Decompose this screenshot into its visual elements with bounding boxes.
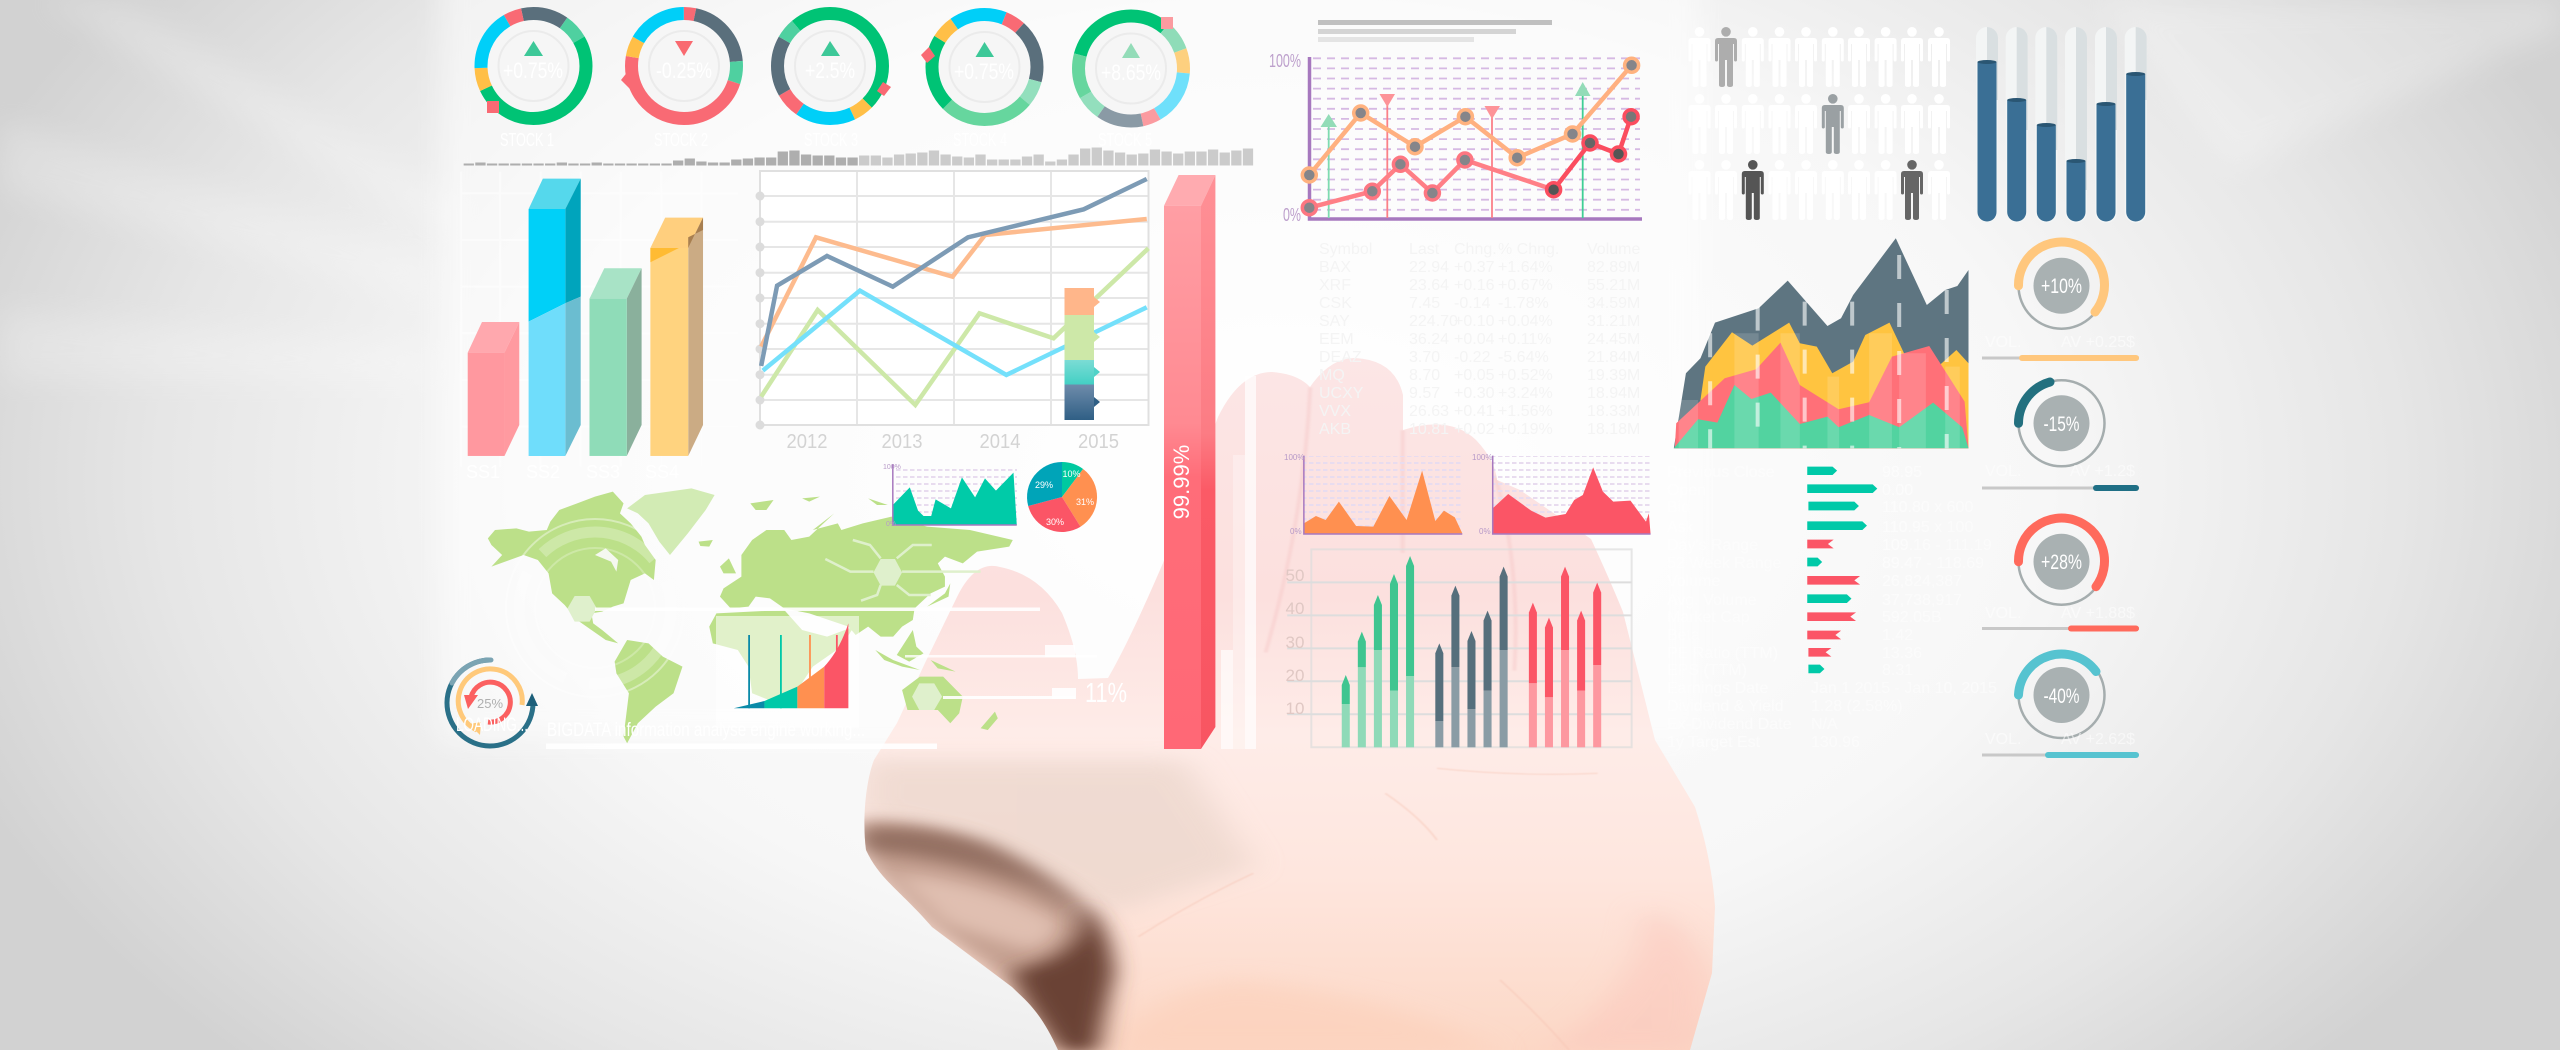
stock table: +0.02: [1454, 421, 1495, 438]
bar labels: SS2: [526, 462, 560, 482]
axis numbers: 50: [1286, 566, 1304, 585]
key statistics labels: Ex-Dividend Date: [1667, 716, 1792, 733]
key statistics labels: Open: [1667, 482, 1706, 499]
stock table: Chng.: [1454, 241, 1497, 258]
stock table: % Chng.: [1498, 241, 1559, 258]
map white rings: [506, 519, 684, 697]
stock table: 18.33M: [1587, 403, 1640, 420]
stock table: VVX: [1319, 403, 1351, 420]
axis numbers: 30: [1286, 633, 1304, 652]
bar labels: SS1: [466, 462, 500, 482]
stock table: XRF: [1319, 277, 1351, 294]
wrist warm shading: [1142, 985, 1427, 1041]
textured light area: [892, 873, 1059, 950]
stock table: +0.16: [1454, 277, 1495, 294]
year labels: 2012: [786, 431, 828, 453]
stock table: -1.78%: [1498, 295, 1549, 312]
Eurasia: [720, 513, 1013, 637]
stock table: +0.37: [1454, 259, 1495, 276]
donut: stock 5: [1078, 16, 1184, 150]
gauge: +28%: [1982, 518, 2139, 632]
gauge: +10%: VOL.: [1985, 334, 2021, 351]
stock table: 31.21M: [1587, 313, 1640, 330]
Africa: [709, 610, 854, 703]
tall red 3D bar: [1164, 175, 1215, 749]
donut: stock 5: STOCK 5: [1098, 130, 1152, 150]
key statistics labels: 1.42: [1882, 627, 1913, 644]
key statistics labels: 52 Week Range: [1667, 555, 1782, 572]
green series: [1342, 650, 1414, 747]
South America: [615, 640, 682, 743]
gauge: -40%: -40%: [2044, 685, 2080, 708]
key statistics labels: 110.80 x 600: [1882, 499, 1973, 516]
donut: stock 2: [621, 14, 736, 150]
stock table: +1.56%: [1498, 403, 1553, 420]
stock table: UCXY: [1319, 385, 1364, 402]
brown crease band: [857, 827, 1101, 927]
stock table: Symbol: [1319, 241, 1372, 258]
axis numbers: 40: [1286, 599, 1304, 618]
stock table: -5.64%: [1498, 349, 1549, 366]
title placeholder bars: [1318, 20, 1552, 42]
stock table: +0.05: [1454, 367, 1495, 384]
donut: stock 2: STOCK 2: [654, 130, 708, 150]
key statistics labels: 37,738,917: [1882, 592, 1962, 609]
people pictogram grid: [1688, 27, 1950, 220]
stock table: +0.67%: [1498, 277, 1553, 294]
Hudson Bay: [595, 548, 618, 572]
teal area mini chart: 100%: [883, 464, 901, 471]
red mini area chart: [1472, 453, 1651, 536]
3D bar chart: [461, 172, 738, 467]
stock table: 18.94M: [1587, 385, 1640, 402]
stock table: [1319, 241, 1640, 438]
key statistics labels: 98.95: [1882, 464, 1922, 481]
gauge: -40%: AV +2.62$: [2061, 731, 2135, 748]
stock table: 22.94: [1409, 259, 1449, 276]
white connector lines and percent labels over thumb: [595, 608, 1127, 708]
key statistics labels: Jan 1 2015 - Jan 10, 2015: [1811, 680, 1997, 697]
stock table: Last: [1409, 241, 1440, 258]
pie chart: 29%: [1035, 480, 1053, 490]
gauge: -15%: VOL.: [1985, 463, 2021, 480]
stock table: 26.63: [1409, 403, 1449, 420]
donut: stock 4: [921, 14, 1037, 150]
stock table: +0.04: [1454, 331, 1495, 348]
key statistics labels: 89.47 - 118.69: [1882, 555, 1984, 572]
stock table: 7.45: [1409, 295, 1440, 312]
gauge: +28%: VOL.: [1985, 605, 2021, 622]
donut: stock 5: +8.65%: [1101, 60, 1161, 85]
orange series: [1302, 58, 1639, 182]
bar SS3: [589, 268, 642, 456]
gauge: -15%: AV +1.2$: [2070, 463, 2135, 480]
gauge: -15%: -15%: [2044, 413, 2080, 436]
stock table: 23.64: [1409, 277, 1449, 294]
white finger columns: [1221, 376, 1256, 749]
bar labels: [466, 462, 679, 482]
dark crease: [1012, 907, 1113, 1050]
stock table: MQ: [1319, 367, 1345, 384]
gauge: +10%: AV +0.25$: [2061, 334, 2135, 351]
donut: stock 3: [778, 14, 891, 150]
year labels: [786, 431, 1119, 453]
stock table: +0.41: [1454, 403, 1495, 420]
key statistics labels: 109.16 - 111.19: [1882, 537, 1992, 554]
stock table: +3.24%: [1498, 385, 1553, 402]
stock table: +0.11%: [1498, 331, 1552, 348]
circuit lines and hexagons: [567, 540, 981, 710]
pie chart: 31%: [1076, 497, 1094, 507]
gauge: +28%: +28%: [2041, 551, 2082, 574]
stock table: 19.39M: [1587, 367, 1640, 384]
donut gauges row: [481, 14, 1184, 150]
year labels: 2014: [980, 431, 1020, 453]
overlay rectangle on Africa: [716, 616, 859, 728]
key statistics labels: 1y Target Est: [1667, 734, 1761, 751]
gauge: -40%: VOL.: [1985, 731, 2021, 748]
stock table: DEAZ: [1319, 349, 1362, 366]
key statistics labels: 8.31: [1882, 662, 1913, 679]
stock table: Volume: [1587, 241, 1640, 258]
upper palm grey-tan wash: [863, 760, 1253, 913]
gauge: +28%: AV +1.88$: [2061, 605, 2135, 622]
teal area mini chart: 0%: [886, 521, 896, 528]
white connector lines and percent labels over thumb: 11%: [1085, 677, 1127, 708]
stock table: 18.18M: [1587, 421, 1640, 438]
growth curve mini chart: [734, 623, 848, 708]
stock table: 10.81: [1409, 421, 1449, 438]
gauge: +10%: +10%: [2041, 275, 2082, 298]
test tube bar chart: [1976, 27, 2147, 223]
donut: stock 3: STOCK 3: [804, 130, 858, 150]
stock table: AKB: [1319, 421, 1351, 438]
axes: [1310, 57, 1642, 219]
key statistics labels: PE Ratio (TTM): [1667, 645, 1778, 662]
axis labels: 100%: [1269, 51, 1301, 71]
donut: stock 4: +0.75%: [954, 59, 1014, 84]
key statistics labels: 110.95 x 100: [1882, 519, 1973, 536]
thumb base tan: [857, 820, 1110, 1050]
donut: stock 1: +0.75%: [503, 58, 563, 83]
key statistics labels: 130.96: [1811, 734, 1860, 751]
gauge: -40%: [1982, 652, 2139, 758]
year labels: 2013: [882, 431, 922, 453]
line chart: [756, 171, 1148, 453]
key statistics labels: 592.05B: [1882, 609, 1942, 626]
signal arrows: [1320, 82, 1590, 218]
bar SS2: [529, 179, 581, 456]
red series: [1529, 650, 1601, 747]
stock table: +0.19%: [1498, 421, 1553, 438]
bar labels: SS4: [645, 462, 679, 482]
bar SS1: [468, 322, 519, 456]
key statistics labels: 0.00: [1882, 482, 1913, 499]
orange mini area chart: 100%: [1284, 453, 1304, 462]
pie chart: 30%: [1046, 517, 1064, 527]
stock table: 3.70: [1409, 349, 1440, 366]
tall red 3D bar: 99.99%: [1169, 445, 1194, 519]
stock table: 24.45M: [1587, 331, 1640, 348]
key statistics labels: Earnings Date: [1667, 680, 1768, 697]
teal area mini chart: [883, 464, 1017, 528]
stock table: 36.24: [1409, 331, 1449, 348]
stock table: 55.21M: [1587, 277, 1640, 294]
gauge: -15%: [1982, 380, 2139, 491]
stock table: -0.22: [1454, 349, 1491, 366]
key statistics labels: Avg. Volume: [1667, 592, 1757, 609]
year labels: 2015: [1078, 431, 1119, 453]
loading spinner: [447, 660, 538, 746]
stock table: -0.14: [1454, 295, 1491, 312]
red mini area chart: 100%: [1472, 453, 1492, 462]
horizontal tag bars: [1807, 467, 1877, 673]
key statistics labels: Volume: [1667, 573, 1720, 590]
palm pink shading: [1582, 921, 1706, 1046]
loading spinner: LOADING...: [456, 715, 528, 736]
stock table: 21.84M: [1587, 349, 1640, 366]
key statistics labels: 13.36: [1882, 645, 1922, 662]
stock table: SAY: [1319, 313, 1350, 330]
stock table: 9.57: [1409, 385, 1440, 402]
orange mini area chart: 0%: [1290, 527, 1302, 536]
legend stack: [1064, 288, 1100, 420]
key statistics labels: Dividend & Yield: [1667, 698, 1784, 715]
donut: stock 1: [481, 14, 586, 150]
donut: stock 2: -0.25%: [656, 58, 712, 83]
key statistics labels: 1.28 (2.58%): [1811, 698, 1903, 715]
bar labels: SS3: [586, 462, 620, 482]
key statistics labels: N/A: [1811, 716, 1838, 733]
stock table: +0.52%: [1498, 367, 1553, 384]
axis numbers: 20: [1286, 666, 1304, 685]
stock table: 34.59M: [1587, 295, 1640, 312]
red series: [1302, 110, 1638, 215]
dashed grid: [1313, 58, 1640, 210]
key statistics labels: Beta: [1667, 627, 1700, 644]
orange mini area chart: [1284, 453, 1462, 536]
stock table: 8.70: [1409, 367, 1440, 384]
key statistics labels: Ask: [1667, 519, 1695, 536]
stock table: CSK: [1319, 295, 1352, 312]
key statistics labels: 26,824,387: [1882, 573, 1962, 590]
gauge: +10%: [1982, 242, 2139, 361]
finger separations: [1266, 388, 1516, 671]
donut: stock 1: STOCK 1: [500, 130, 554, 150]
axis labels: [1269, 51, 1301, 225]
world map: [488, 488, 1013, 743]
highlighted people: [1715, 27, 1923, 220]
volume strip bars: [469, 148, 1248, 166]
pie chart: [1027, 462, 1097, 532]
Greenland: [627, 488, 715, 555]
donut: stock 4: STOCK 4: [953, 130, 1007, 150]
key statistics labels: Market Cap: [1667, 609, 1750, 626]
Islands and Australia: [902, 677, 963, 723]
key statistics labels: Previous Close: [1667, 464, 1775, 481]
layered mountain area chart: [1674, 238, 1969, 448]
stock table: +0.04%: [1498, 313, 1553, 330]
stock table: 224.70: [1409, 313, 1458, 330]
key statistics labels: Day's Range: [1667, 537, 1758, 554]
loading spinner: 25%: [477, 696, 503, 711]
stock table: BAX: [1319, 259, 1351, 276]
axis numbers: [1286, 566, 1304, 718]
photo of open hand: [840, 340, 1740, 1050]
donut: stock 3: +2.5%: [805, 58, 855, 83]
axis numbers: 10: [1286, 699, 1304, 718]
stock table: +0.10: [1454, 313, 1495, 330]
key statistics labels: EPS (TTM): [1667, 662, 1747, 679]
axis labels: 0%: [1283, 205, 1301, 225]
palm creases: [1138, 768, 1598, 1050]
pie chart: 10%: [1062, 469, 1081, 479]
key statistics labels: Bid: [1667, 499, 1690, 516]
loading caption and progress bar: BIGDATA information analyse engine working...: [547, 720, 865, 741]
grouped spike bar chart: [1286, 549, 1632, 747]
red mini area chart: 0%: [1479, 527, 1491, 536]
stock table: +0.30: [1454, 385, 1495, 402]
key statistics labels: [1667, 464, 1997, 751]
stock table: EEM: [1319, 331, 1354, 348]
stock table: +1.64%: [1498, 259, 1553, 276]
purple line chart: [1269, 20, 1642, 225]
bar SS4: [650, 218, 703, 456]
stock table: 82.89M: [1587, 259, 1640, 276]
North America: [488, 492, 656, 643]
data lines: [761, 179, 1148, 405]
slate series: [1435, 650, 1508, 747]
